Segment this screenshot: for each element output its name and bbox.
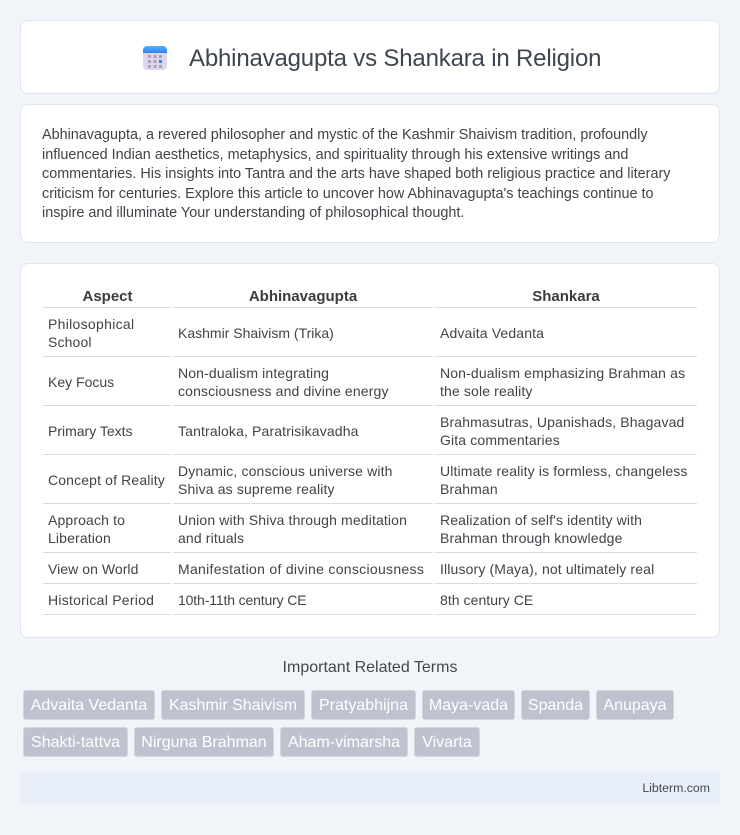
table header <box>82 288 600 305</box>
footer bar <box>20 771 720 805</box>
header card <box>20 20 720 94</box>
row: key focus: Key Focus <box>48 374 114 390</box>
tags row 2: Shakti-tattva <box>31 734 120 751</box>
row: primary texts: Primary Texts <box>48 423 133 439</box>
row: historical period: 8th century CE <box>440 592 533 608</box>
tags row 1: Kashmir Shaivism <box>169 697 297 714</box>
table header: Aspect <box>82 288 133 305</box>
intro text: Abhinavagupta, a revered philosopher and mystic of the Kashmir Shaivism tradition, profoundly <box>42 127 648 143</box>
row: approach to liberation: Realization of self's identity with <box>440 512 642 528</box>
row: historical period: Historical Period <box>48 592 154 608</box>
row: view on world: View on World <box>48 561 138 577</box>
icon: calendar <box>143 46 167 70</box>
row: philosophical school: Advaita Vedanta <box>440 325 544 341</box>
row: primary texts: Tantraloka, Paratrisikavadha <box>178 423 359 439</box>
tags row 2 <box>23 727 480 757</box>
row: philosophical school <box>48 316 544 350</box>
table card <box>20 263 720 638</box>
row: concept of reality: Concept of Reality <box>48 472 165 488</box>
tags row 1: Pratyabhijna <box>319 697 408 714</box>
row: approach to liberation: Brahman through knowledge <box>440 530 623 546</box>
row: view on world: Illusory (Maya), not ultimately real <box>440 561 654 577</box>
table header: Abhinavagupta <box>249 288 357 305</box>
table header: Shankara <box>532 288 600 305</box>
tags row 2: Nirguna Brahman <box>141 734 267 751</box>
row: philosophical school: Philosophical <box>48 316 134 332</box>
tags row 1 <box>23 690 674 720</box>
tags row 1: Anupaya <box>603 697 667 714</box>
row: historical period <box>48 592 533 608</box>
row: concept of reality: Ultimate reality is formless, changeless <box>440 463 688 479</box>
row: primary texts: Brahmasutras, Upanishads, Bhagavad <box>440 414 684 430</box>
comparison table <box>43 288 697 615</box>
tags row 1: Spanda <box>528 697 583 714</box>
tags row 1: Advaita Vedanta <box>31 697 147 714</box>
row: approach to liberation <box>48 512 642 546</box>
row: approach to liberation: Union with Shiva through meditation <box>178 512 407 528</box>
row: concept of reality <box>48 463 688 497</box>
row: historical period: 10th-11th century CE <box>178 592 306 608</box>
row: philosophical school: Kashmir Shaivism (Trika) <box>178 325 334 341</box>
intro text: inspire and illuminate Your understanding of philosophical thought. <box>42 205 464 221</box>
row: concept of reality: Brahman <box>440 481 498 497</box>
row: philosophical school: School <box>48 334 92 350</box>
intro text: criticism for centuries. Explore this article to uncover how Abhinavagupta's teachings continue to <box>42 186 653 202</box>
row: view on world: Manifestation of divine consciousness <box>178 561 424 577</box>
row: concept of reality: Shiva as supreme reality <box>178 481 335 497</box>
tags row 2: Vivarta <box>422 734 472 751</box>
intro card <box>20 104 720 243</box>
row: view on world <box>48 561 654 577</box>
intro text: influenced Indian aesthetics, metaphysics, and spirituality through his extensive writings and <box>42 147 628 163</box>
row: primary texts <box>48 414 684 448</box>
tags row 1: Maya-vada <box>429 697 508 714</box>
row: key focus <box>48 365 685 399</box>
row: primary texts: Gita commentaries <box>440 432 560 448</box>
row: approach to liberation: and rituals <box>178 530 244 546</box>
intro text <box>42 127 670 221</box>
row: approach to liberation: Liberation <box>48 530 111 546</box>
row: key focus: the sole reality <box>440 383 533 399</box>
row: key focus: consciousness and divine energy <box>178 383 389 399</box>
related terms heading: Important Related Terms <box>283 659 457 676</box>
title: Abhinavagupta vs Shankara in Religion <box>189 45 601 72</box>
footer credit: Libterm.com <box>642 781 710 795</box>
row: key focus: Non-dualism emphasizing Brahman as <box>440 365 685 381</box>
row: key focus: Non-dualism integrating <box>178 365 329 381</box>
intro text: commentaries. His insights into Tantra and the arts have shaped both religious practice and literary <box>42 166 670 182</box>
row: approach to liberation: Approach to <box>48 512 125 528</box>
row: concept of reality: Dynamic, conscious universe with <box>178 463 393 479</box>
tags row 2: Aham-vimarsha <box>288 734 400 751</box>
